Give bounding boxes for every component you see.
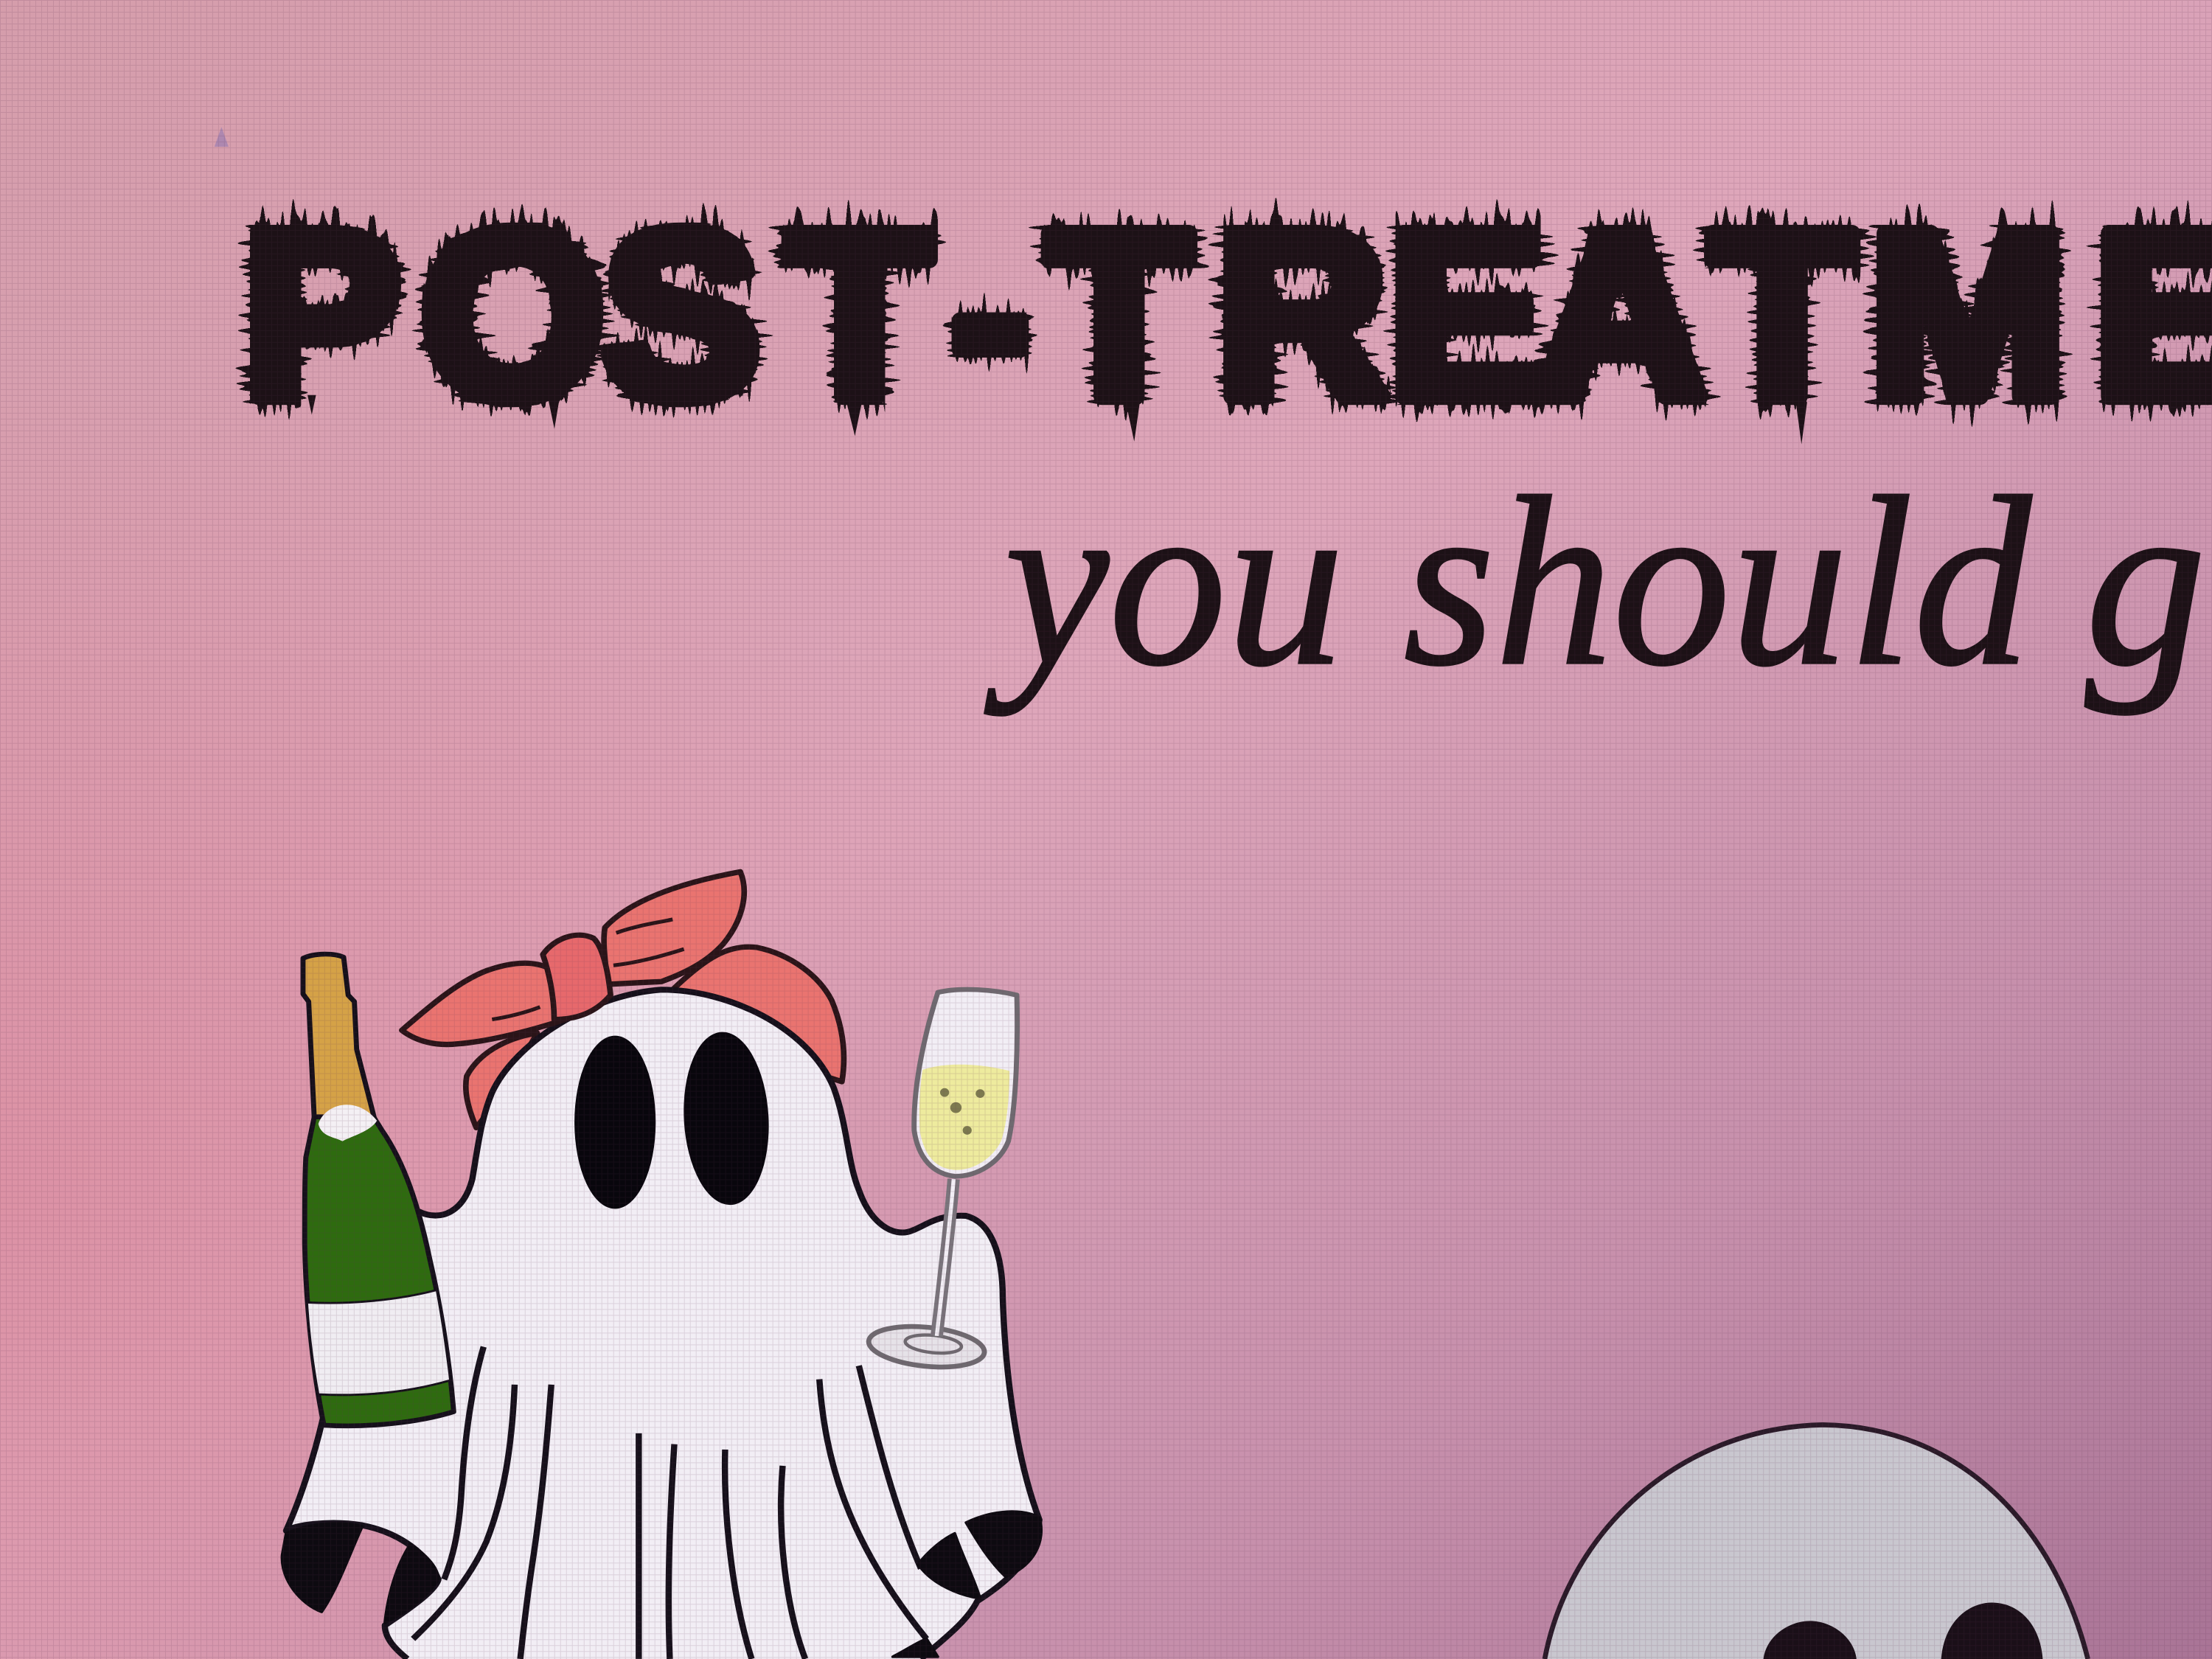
second ghost left eye bbox=[1764, 1621, 1857, 1659]
bubbles bbox=[940, 1088, 984, 1135]
second ghost, partly visible bbox=[1545, 1425, 2088, 1659]
ghost sleeve hems bbox=[282, 1512, 1041, 1657]
small mark at top left bbox=[215, 127, 229, 147]
second ghost head bbox=[1545, 1425, 2088, 1659]
ghost body bbox=[286, 990, 1040, 1659]
bottle foil bbox=[319, 1105, 377, 1141]
subtitle: you should bbox=[982, 448, 2035, 716]
ghost with bandana, champagne bottle and glass bbox=[282, 872, 1041, 1659]
glass foot inner bbox=[904, 1332, 962, 1355]
second ghost right eye bbox=[1941, 1602, 2042, 1659]
bottle neck and cap bbox=[303, 954, 375, 1119]
bottle green body bbox=[305, 1117, 453, 1426]
title drips bbox=[307, 395, 1807, 445]
champagne glass bbox=[866, 990, 1018, 1372]
glass bowl bbox=[914, 990, 1018, 1176]
champagne bbox=[919, 1065, 1009, 1170]
bandana bow bbox=[402, 872, 744, 1045]
bottle label bbox=[307, 1290, 451, 1395]
glass foot bbox=[866, 1321, 987, 1372]
champagne bottle bbox=[303, 954, 453, 1426]
bandana head wrap bbox=[466, 947, 844, 1127]
glass stem bbox=[936, 1179, 953, 1336]
ghost eyes bbox=[574, 1030, 773, 1208]
ghost fold lines bbox=[413, 1347, 927, 1659]
